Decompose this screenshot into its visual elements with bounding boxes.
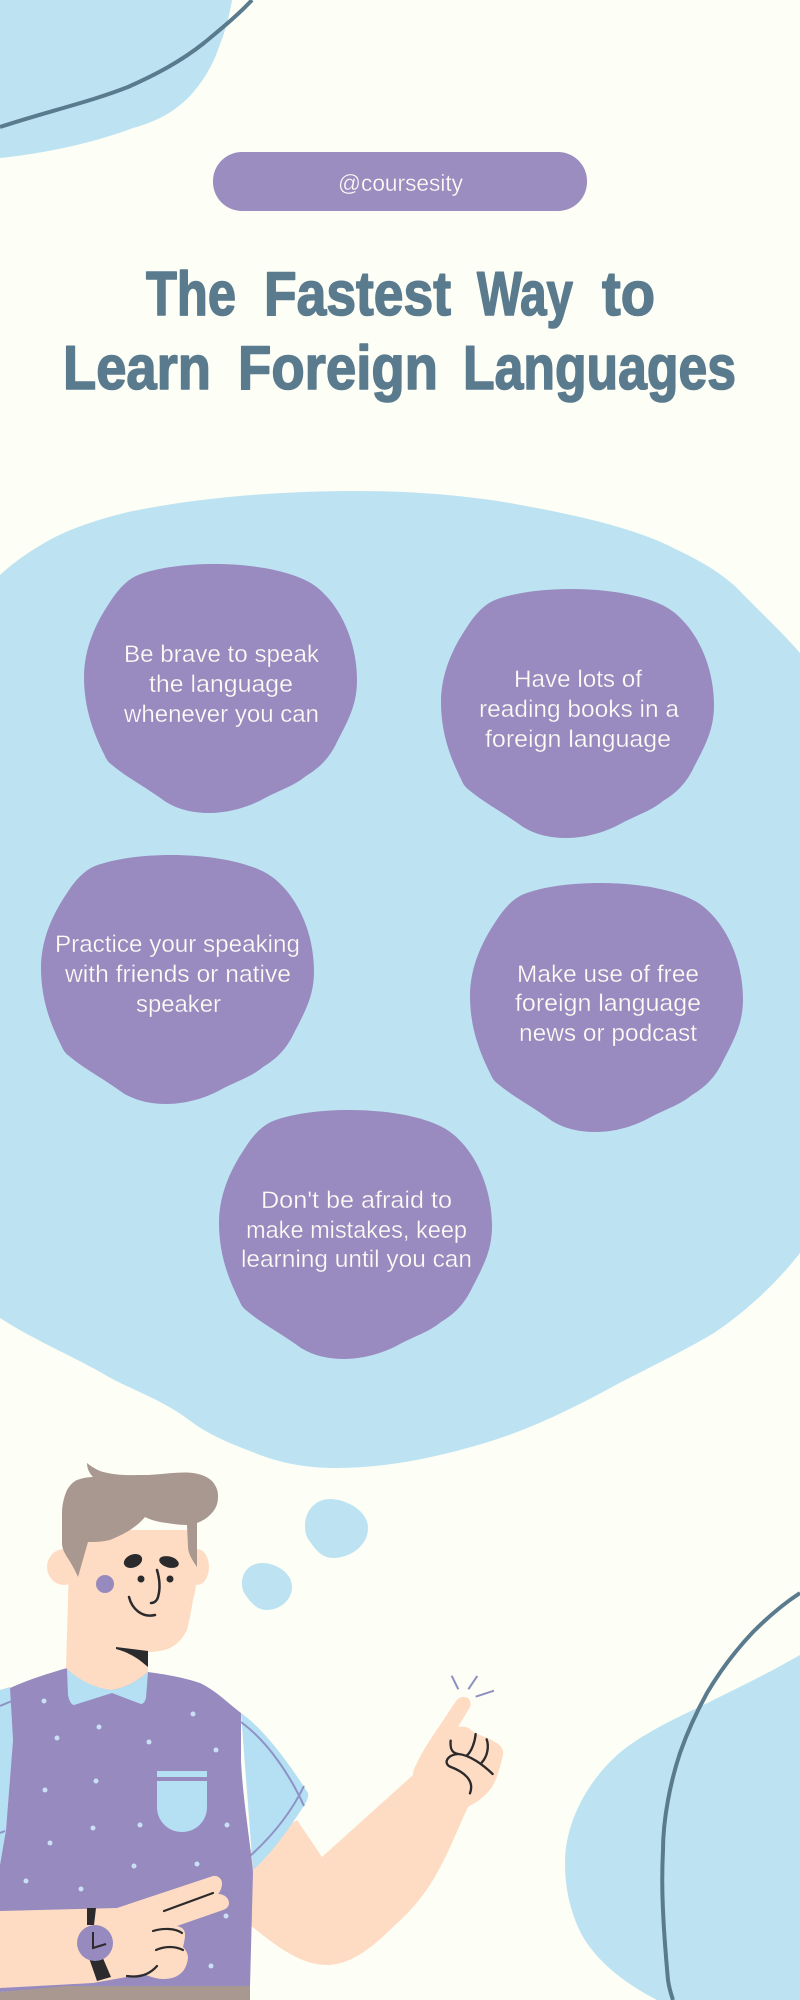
pocket (157, 1771, 207, 1832)
tip bubble 4 (470, 883, 743, 1132)
hair (62, 1463, 218, 1577)
title: The (146, 260, 236, 329)
handle pill (213, 152, 587, 211)
tip bubble 5: learning until you can (241, 1246, 472, 1273)
character (0, 1463, 503, 2000)
tip bubble 4: foreign language (515, 990, 701, 1017)
tip bubble 3 (41, 855, 314, 1104)
tip bubble 3: with friends or native (64, 961, 291, 988)
trousers (0, 1985, 250, 2000)
tip bubble 1: whenever you can (123, 701, 319, 728)
title: Fastest (264, 260, 451, 329)
title: Languages (463, 334, 736, 403)
title: Way (477, 260, 573, 329)
title: to (602, 260, 655, 329)
wristwatch (77, 1908, 113, 1981)
tip bubble 1: the language (149, 671, 293, 698)
face details (96, 1551, 180, 1616)
tip bubble 2: reading books in a (479, 696, 680, 723)
thought bubbles (242, 1499, 368, 1610)
tip bubble 5: Don't be afraid to (261, 1187, 452, 1214)
handle pill: @coursesity (338, 170, 463, 196)
title: Learn (63, 334, 211, 403)
right sleeve (241, 1713, 308, 1870)
front forearm and hand (0, 1876, 229, 1988)
tip bubble 2 (441, 589, 714, 838)
vest dots (24, 1698, 230, 1968)
top-left decorative blob (0, 0, 252, 158)
tip bubble 1 (84, 564, 357, 813)
title (63, 260, 736, 403)
title: Foreign (238, 334, 438, 403)
hand lines (127, 1893, 213, 1977)
bottom-right decorative blob (565, 1593, 800, 2000)
tip bubble 5 (219, 1110, 492, 1359)
fist finger lines (447, 1734, 493, 1793)
right arm raised with pointing finger (250, 1697, 503, 1965)
tip bubble 2: Have lots of (514, 666, 642, 693)
tip bubble 4: news or podcast (519, 1020, 697, 1047)
tip bubble 1: Be brave to speak (124, 641, 320, 668)
neck shadow (116, 1647, 148, 1667)
tip bubble 3: Practice your speaking (55, 931, 300, 958)
tip bubble 2: foreign language (485, 726, 671, 753)
vest (0, 1668, 253, 1992)
large light blue speech cloud (0, 491, 800, 1468)
left sleeve (0, 1687, 13, 1865)
ears (47, 1549, 209, 1585)
tip bubble 3: speaker (136, 991, 221, 1018)
collar (67, 1669, 148, 1705)
tip bubble 4: Make use of free (517, 961, 699, 988)
tip bubble 5: make mistakes, keep (246, 1217, 467, 1244)
neck and face (66, 1530, 197, 1690)
sparkle marks (452, 1676, 494, 1697)
